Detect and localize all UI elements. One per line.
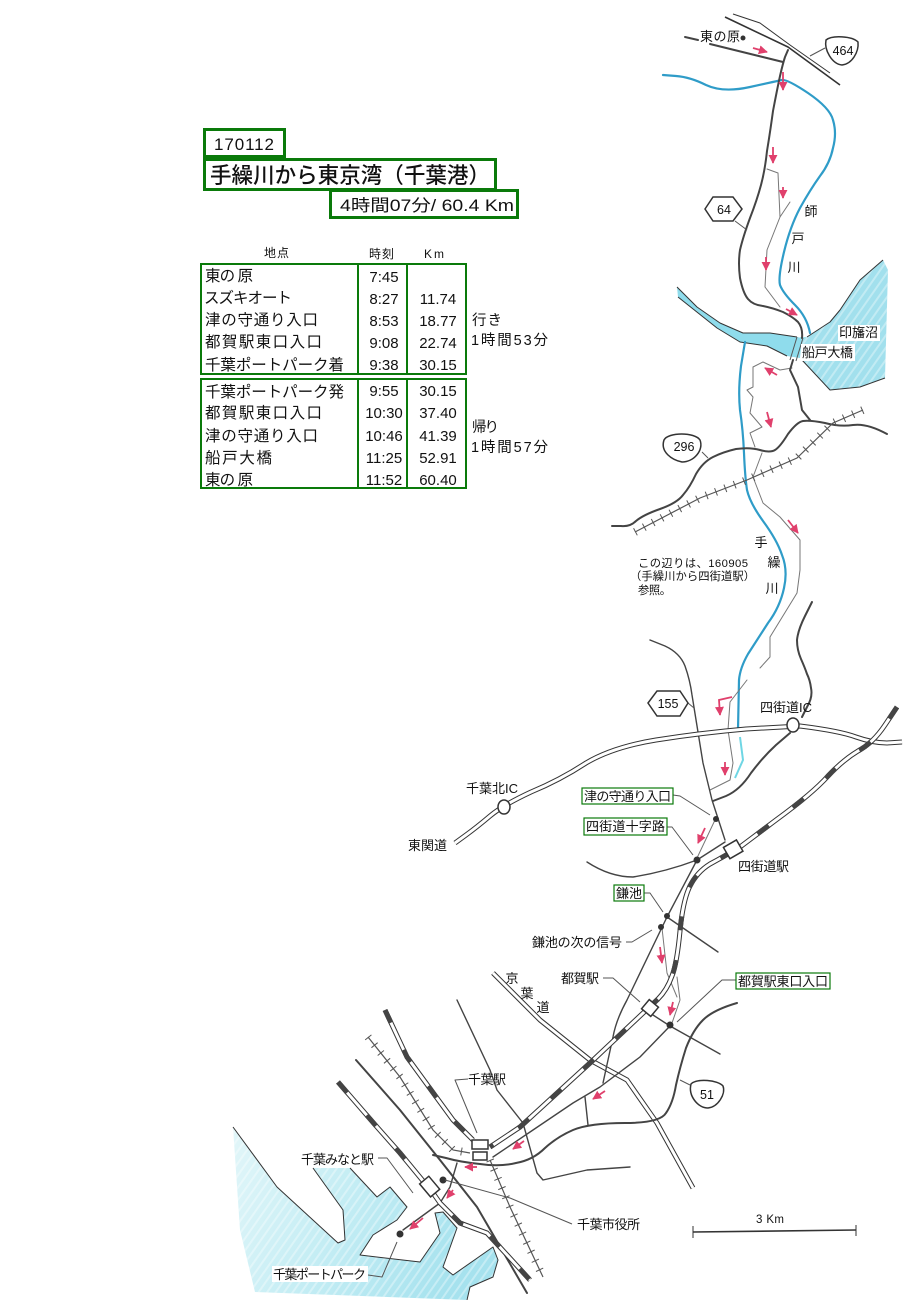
table header: 時刻 — [369, 247, 394, 261]
table: return: 東の 原 — [205, 471, 253, 489]
route shield 464: 464 — [833, 44, 853, 58]
route shield 64 — [705, 197, 742, 221]
place labels: 四街道IC — [760, 700, 812, 715]
Funato bridge — [790, 337, 803, 361]
table: outbound: 8:27 — [369, 291, 399, 308]
table header: Km — [424, 247, 444, 261]
note: see earlier route: 参照。 — [638, 584, 671, 597]
route shield 296 — [663, 434, 701, 462]
boxed waypoint: Tsuga station east entrance: 都賀駅東口入口 — [738, 974, 828, 989]
place labels: 千葉みなと駅 — [301, 1152, 374, 1167]
expressway — [455, 726, 902, 843]
boxed waypoint: Yotsukaido crossing: 四街道十字路 — [586, 819, 665, 834]
water: Tokyo Bay — [233, 1127, 498, 1300]
place labels: 四街道駅 — [738, 859, 789, 874]
table: return: 11:52 — [366, 472, 402, 489]
route shield 296: 296 — [674, 440, 694, 454]
Sobu line, north-west branch — [385, 1010, 473, 1140]
table: return: 41.39 — [419, 428, 457, 445]
table: outbound: 津の守通り入口 — [205, 311, 318, 329]
stations — [420, 718, 799, 1197]
place labels: 千葉駅 — [468, 1072, 506, 1087]
table: outbound: 8:53 — [369, 313, 399, 330]
place labels: 手 — [754, 535, 768, 550]
place labels: 京 — [505, 971, 519, 986]
place labels: 千葉市役所 — [577, 1217, 640, 1232]
river: Shido river — [663, 75, 835, 333]
title: 手繰川から東京湾（千葉港） — [210, 163, 490, 188]
table: return — [201, 379, 466, 489]
place labels: 戸 — [791, 231, 805, 246]
table: outbound: 9:38 — [369, 357, 399, 374]
place labels: 船戸大橋 — [802, 345, 853, 360]
table: outbound: 東の 原 — [205, 267, 253, 285]
table: outbound: 9:08 — [369, 335, 399, 352]
table: outbound: スズキオート — [204, 289, 292, 307]
table: outbound: 都賀駅東口入口 — [205, 333, 322, 351]
table: return: 津の守通り入口 — [205, 427, 318, 445]
map — [233, 14, 902, 1300]
table: outbound: 7:45 — [369, 269, 399, 286]
table: return: 52.91 — [419, 450, 457, 467]
place labels: 葉 — [520, 986, 534, 1001]
place labels: 川 — [765, 581, 779, 596]
monorail with ticks — [368, 1037, 543, 1277]
Keiyo road — [493, 973, 693, 1188]
route shield 51: 51 — [700, 1088, 714, 1102]
table: return: 船戸大橋 — [205, 449, 272, 467]
table: outbound — [201, 264, 466, 374]
place labels: 川 — [787, 260, 801, 275]
direction arrows — [410, 48, 798, 1229]
table: outbound: 11.74 — [420, 291, 456, 308]
place labels: 都賀駅 — [561, 971, 599, 986]
date label — [204, 130, 284, 156]
scale bar: 3 Km — [756, 1214, 784, 1226]
total time and distance — [330, 190, 518, 218]
place labels: 鎌池の次の信号 — [532, 935, 622, 950]
route shield 464 — [826, 37, 858, 65]
return duration note: 1時間57分 — [471, 439, 548, 456]
table: return: 11:25 — [366, 450, 402, 467]
roads, south section — [356, 820, 737, 1293]
table: outbound: 22.74 — [419, 335, 457, 352]
table: return: 10:46 — [365, 428, 403, 445]
railway with ticks, north — [635, 410, 863, 532]
route signal dots — [396, 36, 746, 1238]
route shield 64: 64 — [717, 203, 731, 217]
note: see earlier route: （手繰川から四街道駅） — [630, 569, 755, 583]
date label: 170112 — [214, 135, 274, 154]
table: return: 都賀駅東口入口 — [205, 404, 322, 422]
place labels: 印旛沼 — [839, 325, 878, 340]
leader lines — [368, 48, 825, 1277]
note: see earlier route — [630, 557, 755, 597]
place labels — [272, 29, 880, 1282]
table: outbound: 30.15 — [419, 357, 457, 374]
table: return: 千葉ポートパーク発 — [205, 383, 344, 401]
river: Tega river — [735, 342, 786, 778]
national road 464 — [725, 14, 840, 85]
place labels: 東関道 — [408, 838, 447, 853]
cycling route, thin paths — [710, 169, 800, 790]
place labels: 道 — [536, 1000, 550, 1015]
table: return: 37.40 — [419, 405, 457, 422]
table header: 地点 — [264, 246, 289, 260]
note: see earlier route: この辺りは、160905 — [638, 557, 748, 570]
table: return: 30.15 — [419, 383, 457, 400]
route shield 51 — [690, 1080, 724, 1108]
boxed waypoint: Kamaike: 鎌池 — [616, 886, 642, 901]
table: outbound: 千葉ポートパーク着 — [205, 356, 344, 374]
route shield 155 — [648, 691, 688, 716]
roads, north section — [612, 37, 887, 840]
place labels: 師 — [804, 204, 818, 219]
outbound duration note: 行き — [472, 312, 502, 329]
water: Inba marsh and channel — [677, 260, 888, 390]
outbound duration note — [471, 312, 548, 349]
place labels: 千葉ポートパーク — [273, 1267, 366, 1282]
place labels: 東の原 — [700, 29, 740, 44]
return duration note: 帰り — [472, 418, 499, 436]
table: outbound: 18.77 — [419, 313, 457, 330]
table: return: 10:30 — [365, 405, 403, 422]
Keiyo railway — [338, 1082, 530, 1280]
boxed waypoint: Tsunomori entrance: 津の守通り入口 — [584, 789, 671, 804]
table: return: 60.40 — [419, 472, 457, 489]
place labels: 繰 — [767, 555, 781, 570]
table: return: 9:55 — [369, 383, 399, 400]
outbound duration note: 1時間53分 — [471, 332, 548, 349]
place labels: 千葉北IC — [466, 781, 518, 796]
Sobu railway — [490, 707, 897, 1147]
total time and distance: 4時間07分/ 60.4 Km — [340, 196, 514, 215]
table header — [264, 246, 444, 261]
return duration note — [471, 418, 548, 456]
route shield 155: 155 — [658, 697, 678, 711]
